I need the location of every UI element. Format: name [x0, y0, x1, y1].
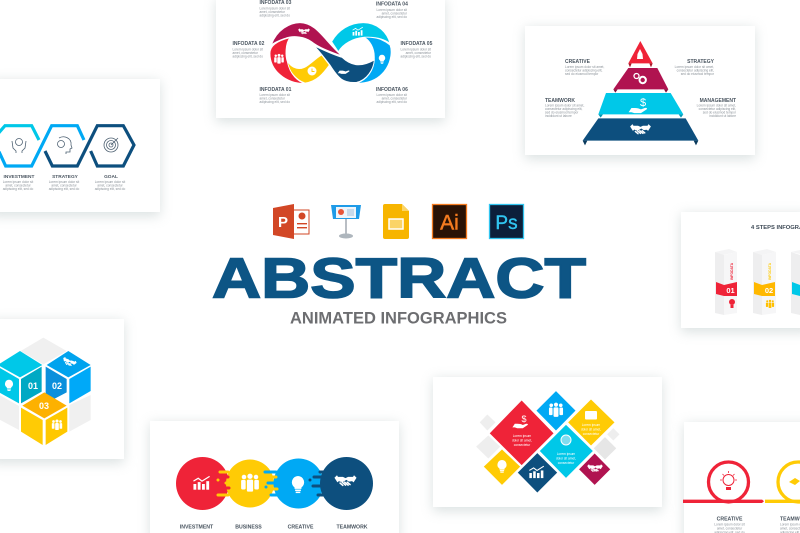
infinity labels: amet, consectetur [260, 10, 286, 14]
infinity labels: adipiscing elit, sed do [260, 14, 290, 18]
diamond icons and text: Lorem ipsum [557, 452, 576, 456]
loop labels [714, 516, 800, 533]
pillar 2 [753, 249, 776, 315]
circle labels [180, 524, 368, 530]
infinity labels: INFODATA 06 [376, 87, 408, 93]
circle labels: TEAMWORK [336, 524, 368, 530]
hexagon icons [12, 137, 118, 154]
pyramid labels: MANAGEMENT [700, 98, 736, 104]
circle labels: INVESTMENT [180, 524, 214, 530]
icon: PowerPoint [273, 204, 309, 239]
pyramid labels: STRATEGY [687, 59, 715, 65]
panel: diamonds infographic [433, 377, 662, 507]
hexagon labels: amet, consectetur [51, 184, 78, 188]
infinity labels: Lorem ipsum dolor sit [232, 48, 263, 52]
panel: cube infographic [0, 319, 124, 459]
icon: PowerPoint: P [278, 214, 288, 231]
infinity labels: adipiscing elit, sed do [232, 54, 263, 58]
hexagon chain [0, 126, 134, 166]
diamond icons and text: dolor sit amet, [581, 428, 601, 432]
diamond icons and text: Lorem ipsum [513, 434, 532, 438]
cube numbers and icons [5, 356, 77, 430]
hexagon labels: Lorem ipsum dolor sit [3, 180, 33, 184]
infinity labels: INFODATA 02 [232, 41, 265, 47]
icon: Illustrator [432, 204, 466, 238]
circle icons [193, 474, 357, 493]
pyramid [583, 41, 698, 145]
pyramid labels [545, 59, 737, 118]
icon: Photoshop [490, 204, 524, 238]
pyramid labels: Lorem ipsum dolor sit amet, [565, 65, 604, 69]
pyramid labels: sed do eiusmod tempor [545, 110, 579, 114]
pyramid labels: Lorem ipsum dolor sit amet, [545, 104, 584, 108]
infinity loop [270, 23, 391, 84]
pyramid labels: TEAMWORK [545, 98, 575, 104]
pillar 2: INFODATA [768, 262, 772, 280]
yellow loop [765, 462, 800, 502]
loop labels: amet, consectetur [717, 526, 743, 530]
pillar 2: 02 [765, 286, 773, 295]
hexagon labels: INVESTMENT [4, 174, 35, 180]
infinity labels: adipiscing elit, sed do [377, 15, 407, 19]
diamond icons and text: consectetur [558, 461, 575, 465]
hexagon labels: GOAL [104, 174, 118, 180]
panel: circles infographic [150, 421, 399, 533]
pyramid labels: sed do eiusmod tempor [703, 110, 737, 114]
red loop [683, 462, 764, 503]
pyramid labels: sed do eiusmod tempor [565, 72, 599, 76]
infinity labels: adipiscing elit, sed do [401, 54, 431, 58]
pyramid icons: $ [640, 97, 646, 109]
cube numbers and icons: 01 [28, 381, 38, 391]
infinity labels: amet, consectetur [382, 12, 408, 16]
infinity labels: INFODATA 03 [260, 0, 292, 6]
hexagon labels: Lorem ipsum dolor sit [95, 180, 125, 184]
cube numbers and icons: 03 [39, 401, 49, 411]
panel: infinity infographic [216, 0, 445, 118]
infinity labels: amet, consectetur [260, 96, 286, 100]
infinity labels: Lorem ipsum dolor sit [377, 93, 407, 97]
diamond icons and text: consectetur [583, 432, 600, 436]
infinity icons [274, 27, 385, 76]
pyramid labels: consectetur adipiscing elit, [699, 107, 736, 111]
icon: Google Slides [383, 204, 409, 239]
circle labels: CREATIVE [288, 524, 314, 530]
panel: loop timeline infographic [683, 422, 800, 533]
hexagon labels: adipiscing elit, sed do [3, 187, 33, 191]
infinity labels: Lorem ipsum dolor sit [401, 48, 431, 52]
pyramid labels: Lorem ipsum dolor sit amet, [675, 65, 714, 69]
infinity labels: adipiscing elit, sed do [377, 100, 407, 104]
infinity labels: INFODATA 01 [260, 87, 292, 93]
hexagon labels: amet, consectetur [97, 184, 124, 188]
hexagon labels: STRATEGY [52, 174, 79, 180]
hexagon labels: adipiscing elit, sed do [95, 187, 125, 191]
pyramid labels: consectetur adipiscing elit, [677, 68, 714, 72]
icon: Keynote [331, 205, 361, 238]
hexagon labels: adipiscing elit, sed do [49, 187, 79, 191]
pyramid labels: Lorem ipsum dolor sit amet, [697, 104, 736, 108]
loop labels: Lorem ipsum dolor sit [714, 522, 745, 526]
diamond icons and text: consectetur [514, 443, 531, 447]
infinity labels: INFODATA 05 [400, 41, 433, 47]
diamond icons and text: dolor sit amet, [512, 438, 532, 442]
hexagon labels [3, 174, 125, 191]
circle labels: BUSINESS [235, 524, 262, 530]
subtitle: ANIMATED INFOGRAPHICS [290, 310, 507, 328]
pillar 1: 01 [726, 286, 735, 295]
pyramid labels: incididunt ut labore [545, 114, 572, 118]
infinity labels: Lorem ipsum dolor sit [260, 6, 290, 10]
diamond icons and text [497, 403, 603, 478]
cube numbers and icons: 02 [52, 381, 62, 391]
infinity labels: amet, consectetur [232, 51, 259, 55]
pyramid labels: sed do eiusmod tempor [681, 72, 715, 76]
infinity labels: INFODATA 04 [376, 2, 408, 8]
loop icons [720, 471, 800, 490]
panel: 4 steps infographic [681, 212, 800, 328]
pyramid labels: consectetur adipiscing elit, [565, 68, 602, 72]
loop labels: CREATIVE [717, 516, 743, 522]
infinity labels: amet, consectetur [406, 51, 432, 55]
hexagon labels: amet, consectetur [5, 184, 32, 188]
pyramid labels: incididunt ut labore [709, 114, 736, 118]
pyramid icons [629, 49, 651, 135]
hexagon labels: Lorem ipsum dolor sit [49, 180, 79, 184]
diamond icons and text: Lorem ipsum [582, 423, 601, 427]
diamond tiles [476, 391, 620, 493]
pyramid labels: consectetur adipiscing elit, [545, 107, 582, 111]
infinity labels [232, 0, 433, 104]
diamond icons and text: $ [521, 414, 527, 424]
diamond icons and text: dolor sit amet, [556, 456, 576, 460]
icon: Illustrator: Ai [440, 212, 459, 234]
panel: pyramid infographic [525, 26, 755, 155]
cube blocks [0, 338, 91, 445]
infinity labels: adipiscing elit, sed do [260, 100, 290, 104]
pillar 1: INFODATA [730, 262, 734, 280]
panel: hexagon infographic [0, 79, 160, 212]
infinity labels: Lorem ipsum dolor sit [377, 8, 407, 12]
pillar 1 [715, 249, 737, 315]
pillar 3 [791, 250, 800, 315]
pyramid labels: CREATIVE [565, 59, 591, 65]
infinity labels: amet, consectetur [382, 96, 408, 100]
infinity labels: Lorem ipsum dolor sit [260, 93, 290, 97]
icon: Photoshop: Ps [495, 213, 518, 234]
connected circles [176, 457, 373, 510]
title: ABSTRACT [212, 246, 586, 310]
